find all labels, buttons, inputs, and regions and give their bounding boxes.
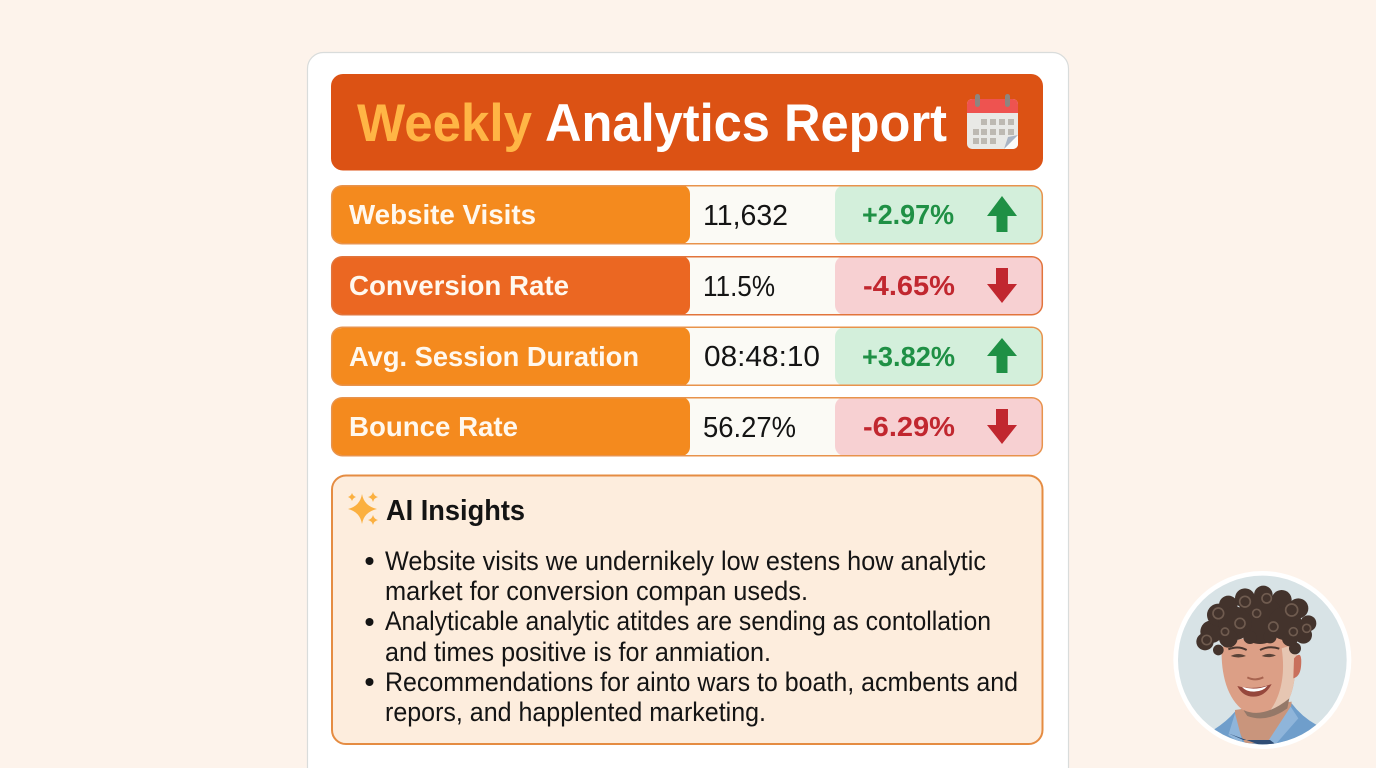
bullet list (366, 546, 1018, 727)
avatar portrait (1173, 571, 1351, 750)
title: Weekly (357, 94, 532, 153)
value: 11.5% (703, 271, 775, 303)
value: 56.27% (703, 412, 796, 444)
label: Bounce Rate (349, 411, 518, 442)
title: Analytics Report (545, 94, 947, 153)
icon: up arrow (987, 338, 1017, 373)
change: -6.29% (863, 411, 955, 442)
icon: calendar (967, 94, 1018, 149)
label: Website Visits (349, 199, 536, 230)
label: Avg. Session Duration (349, 341, 639, 372)
metric row: Avg. Session Duration (320, 327, 1055, 386)
heading: AI Insights (386, 495, 525, 527)
change: +3.82% (862, 341, 955, 372)
bullet list: Analyticable analytic atitdes are sending as contollation (385, 606, 991, 636)
change: -4.65% (863, 270, 955, 301)
bullet list: Website visits we undernikely low estens how analytic (385, 546, 986, 576)
icon: down arrow (987, 409, 1017, 444)
value: 11,632 (703, 200, 788, 232)
icon: down arrow (987, 268, 1017, 303)
bullet list: and times positive is for anmiation. (385, 637, 771, 667)
value: 08:48:10 (704, 341, 820, 373)
bullet list: repors, and happlented marketing. (385, 697, 766, 727)
icon: sparkles (348, 492, 378, 525)
icon: up arrow (987, 196, 1017, 232)
report card (308, 52, 1068, 768)
label: Conversion Rate (349, 270, 569, 301)
metric row: Website Visits (320, 185, 1055, 244)
metric row: Conversion Rate (320, 256, 1055, 315)
bullet list: market for conversion compan useds. (385, 576, 808, 606)
change: +2.97% (862, 199, 954, 230)
bullet list: Recommendations for ainto wars to boath, acmbents and (385, 667, 1018, 697)
header banner (331, 74, 1043, 170)
panel: AI insights (332, 476, 1042, 744)
metric row: Bounce Rate (320, 397, 1055, 456)
